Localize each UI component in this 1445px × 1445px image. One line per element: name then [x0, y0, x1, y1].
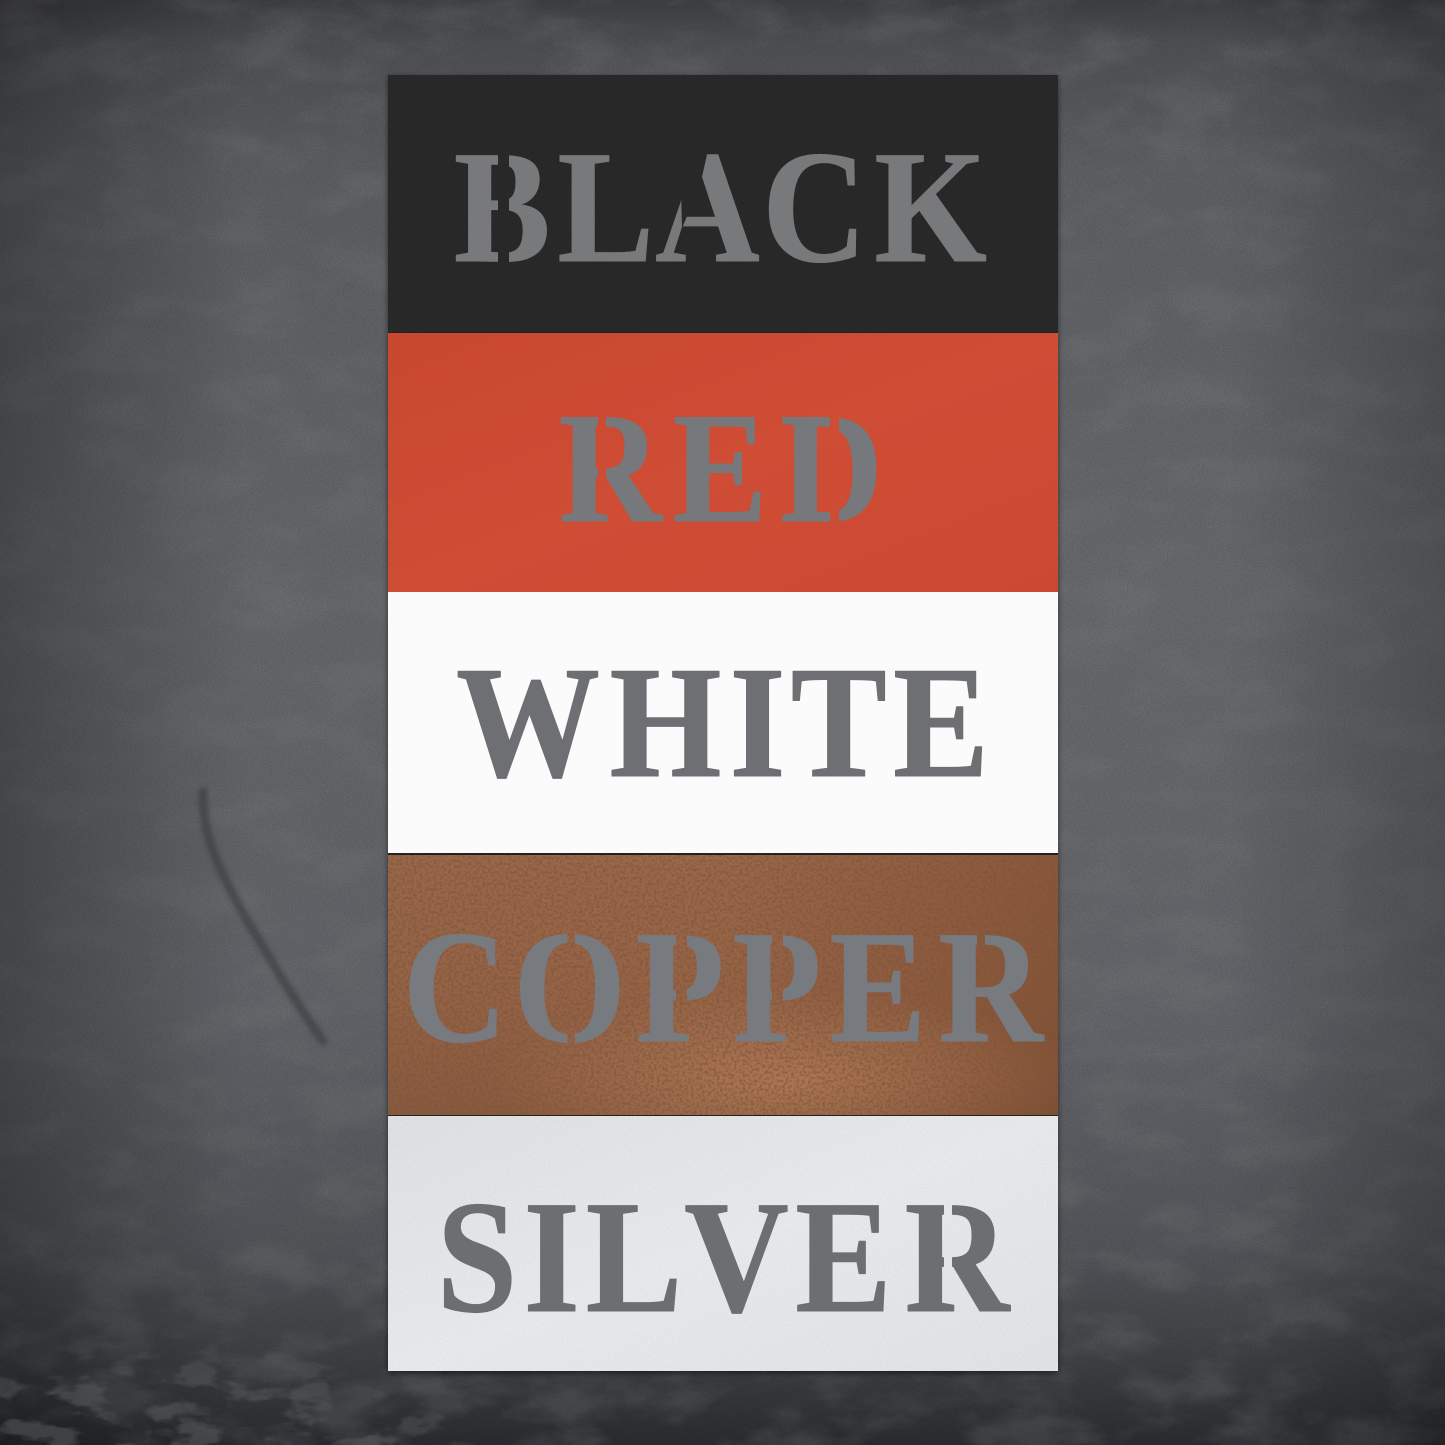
panel: white — [388, 592, 1058, 853]
label: RED: RED — [559, 380, 883, 556]
sign: stacked colour panels — [388, 75, 1058, 1371]
panel: copper — [388, 855, 1058, 1115]
panel: silver — [388, 1116, 1058, 1371]
panel: red — [388, 333, 1058, 592]
label: SILVER: SILVER — [437, 1169, 1011, 1347]
wall scratch — [203, 792, 323, 1041]
label: COPPER: COPPER — [403, 899, 1044, 1077]
label: BLACK: BLACK — [454, 119, 987, 297]
panel: black — [388, 75, 1058, 332]
label: WHITE: WHITE — [456, 633, 989, 811]
